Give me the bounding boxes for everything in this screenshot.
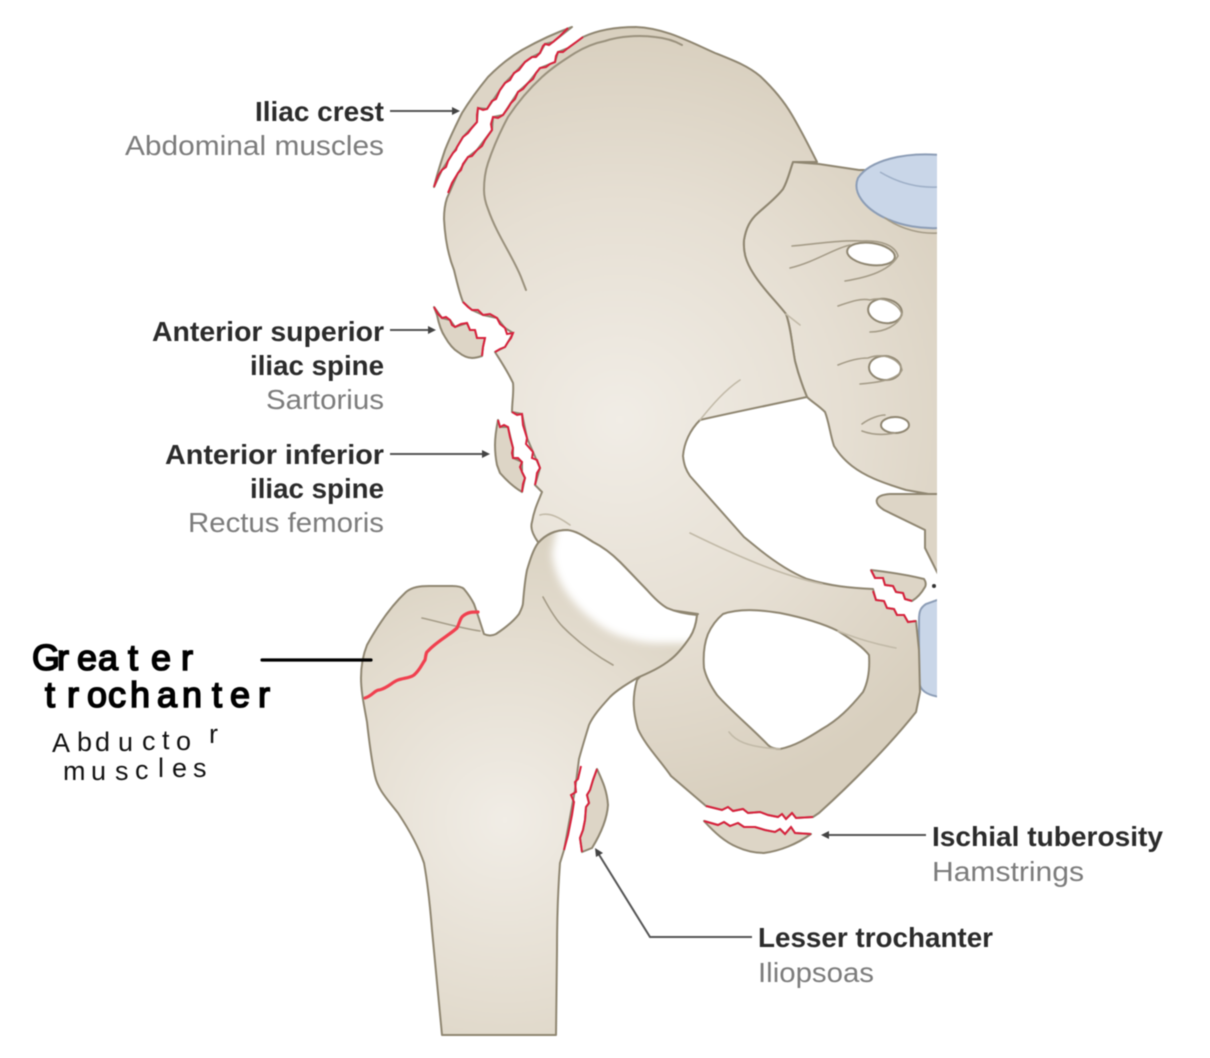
handwritten label: Abductor muscles: muscles (63, 753, 206, 786)
fracture fragments (434, 27, 926, 853)
small dot marker (932, 584, 936, 588)
pubic symphysis cartilage (919, 599, 940, 697)
handwritten label: Abductor muscles (52, 719, 218, 786)
ischial tuberosity fragment (704, 821, 811, 853)
handwritten label: Greater trochanter (32, 637, 270, 715)
label: anterior superior iliac spine: iliac spine (250, 350, 384, 381)
sacral foramina (790, 240, 909, 434)
femoral head highlight (548, 530, 696, 647)
AIIS fracture (498, 420, 525, 492)
pubic fracture (871, 570, 912, 601)
pubic fragment (871, 570, 926, 601)
label: ischial tuberosity (821, 821, 1163, 887)
lesser trochanter fracture (564, 766, 581, 850)
label: lesser trochanter: Iliopsoas (758, 957, 874, 988)
pointer: greater trochanter (262, 658, 371, 662)
handwritten label: Abductor muscles: Abductor (52, 719, 218, 758)
femoral head outline (538, 530, 697, 660)
label: anterior inferior iliac spine: Anterior inferior (165, 439, 384, 470)
ASIS fragment (434, 307, 485, 358)
iliac crest fragment (434, 27, 572, 187)
ilium and ischium (444, 27, 920, 819)
label: ischial tuberosity: Hamstrings (932, 856, 1084, 887)
label: anterior inferior iliac spine (165, 439, 490, 538)
ASIS fracture (434, 307, 485, 356)
sacral disc: blue cartilage (856, 154, 940, 228)
label: lesser trochanter (595, 848, 993, 988)
femur (361, 530, 697, 1035)
label: lesser trochanter: Lesser trochanter (758, 922, 993, 953)
femur surface lines (422, 597, 613, 665)
label: anterior superior iliac spine: Sartorius (266, 384, 384, 415)
coccyx (877, 494, 940, 578)
ischial fracture (706, 806, 813, 819)
greater trochanter hand-drawn fracture (365, 612, 478, 698)
label: ischial tuberosity: Ischial tuberosity (932, 821, 1163, 852)
handwritten label: Greater trochanter: Greater (32, 637, 193, 678)
red fracture lines (434, 28, 916, 852)
handwritten label: Greater trochanter: trochanter (45, 674, 270, 715)
label: anterior superior iliac spine (152, 316, 436, 415)
bone surface contour lines (484, 36, 896, 749)
label: iliac crest (125, 96, 460, 161)
lesser trochanter fragment (580, 769, 608, 852)
label: anterior inferior iliac spine: Rectus femoris (188, 507, 384, 538)
label: anterior superior iliac spine: Anterior superior (152, 316, 384, 347)
sacrum (744, 154, 940, 697)
label: iliac crest: Iliac crest (255, 96, 384, 127)
label: iliac crest: Abdominal muscles (125, 130, 384, 161)
AIIS fragment (495, 420, 525, 492)
iliac crest fracture (434, 28, 568, 187)
label: anterior inferior iliac spine: iliac spine (250, 473, 384, 504)
